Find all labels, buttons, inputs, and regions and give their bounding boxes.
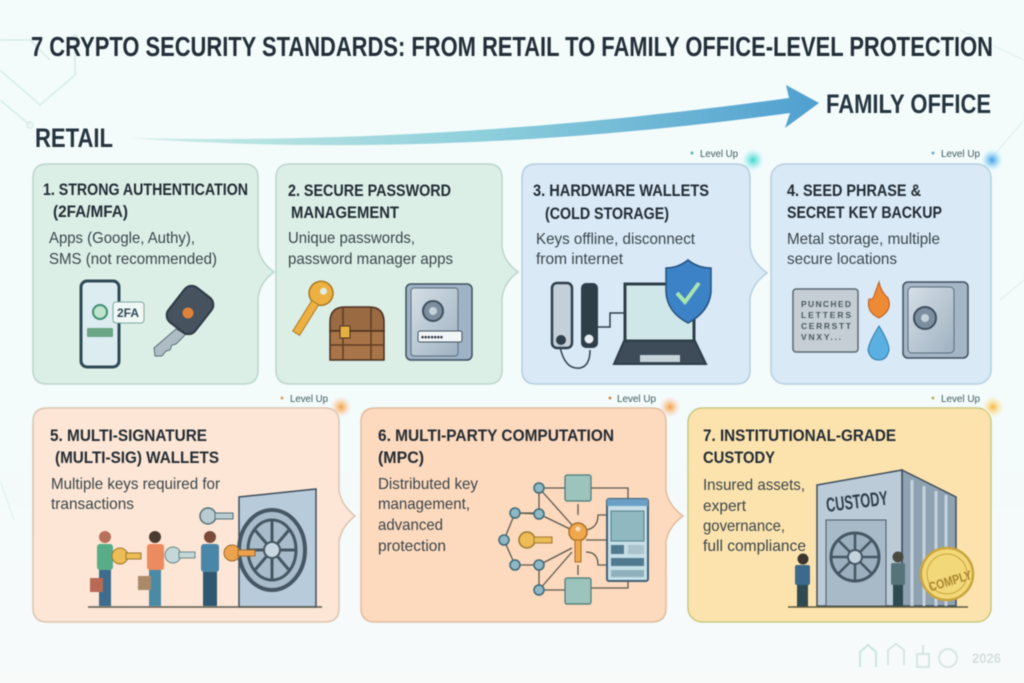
label: family office: FAMILY OFFICE [826, 89, 991, 119]
heading: 1. STRONG AUTHENTICATION [43, 180, 248, 199]
description: secure locations [787, 251, 897, 268]
compliance stamp: COMPLY [927, 567, 974, 594]
ground line [788, 606, 968, 608]
footer icons and year: 2026 [972, 650, 1001, 666]
heading: (MPC) [378, 448, 424, 467]
nodes [499, 483, 544, 595]
icon: water drop [868, 326, 889, 360]
progress arrow from retail to family office [130, 85, 819, 145]
description: Multiple keys required for [51, 476, 221, 493]
heading: SECRET KEY BACKUP [787, 203, 942, 222]
level up tag 4 [932, 148, 1003, 171]
icon: safe [903, 282, 968, 358]
description: full compliance [703, 538, 806, 555]
heading: 2. SECURE PASSWORD [288, 181, 451, 200]
description: protection [378, 538, 446, 555]
level up tag 6 [608, 393, 681, 418]
level up tag 7: Level Up [941, 393, 980, 405]
panel 6: multi-party computation [361, 408, 683, 622]
description: SMS (not recommended) [49, 251, 217, 268]
icon: phone with 2FA [81, 281, 144, 367]
key gold right [224, 545, 255, 561]
icon: flame [868, 282, 889, 318]
description: governance, [703, 518, 785, 535]
icon: punched metal plate: CERRSTT [801, 321, 852, 331]
heading: 5. MULTI-SIGNATURE [50, 426, 207, 445]
panel 1: strong authentication [33, 164, 274, 384]
description: Keys offline, disconnect [536, 231, 696, 248]
network diagram [499, 475, 648, 604]
level up tag 4: Level Up [941, 148, 980, 160]
people holding keys [88, 508, 322, 607]
level up tag 5: Level Up [290, 393, 328, 405]
icon: car-style key [154, 282, 217, 356]
icon: punched metal plate: PUNCHED [801, 299, 851, 309]
central gold key [569, 523, 587, 562]
level up tag 3: Level Up [700, 148, 738, 160]
description: password manager apps [288, 251, 453, 268]
person two [138, 531, 164, 606]
panel 3: hardware wallets [522, 164, 767, 384]
guard left [795, 554, 810, 607]
level up tag 5 [280, 393, 352, 418]
device panel [607, 499, 648, 581]
key floating [200, 508, 233, 524]
heading: 7. INSTITUTIONAL-GRADE [703, 426, 896, 445]
label: retail: RETAIL [35, 123, 113, 153]
small gold key [519, 532, 552, 548]
panel 4: seed phrase backup [771, 164, 991, 384]
description: expert [703, 498, 747, 515]
description: Insured assets, [703, 477, 805, 494]
description: Apps (Google, Authy), [49, 230, 195, 247]
guard right [891, 552, 905, 607]
level up tag 6: Level Up [617, 393, 656, 405]
level up tag 3 [690, 148, 764, 171]
heading: MANAGEMENT [291, 203, 400, 222]
icon: laptop [614, 284, 706, 364]
icon: punched metal plate: LETTERS [801, 310, 851, 320]
key gold left [112, 548, 141, 564]
icon: combination safe: ••••••• [421, 332, 443, 342]
guards [795, 552, 905, 607]
description: Unique passwords, [288, 230, 415, 247]
key silver middle [165, 547, 195, 563]
puzzle pieces [565, 475, 591, 604]
icon: punched metal plate: VNXY... [801, 332, 841, 342]
heading: 3. HARDWARE WALLETS [533, 181, 709, 200]
panel 5: multi-signature wallets [33, 408, 355, 622]
icon: hardware wallet devices [552, 283, 625, 368]
person three [201, 531, 219, 606]
heading: (COLD STORAGE) [545, 204, 669, 223]
footer icons and year [860, 644, 1001, 667]
heading: (2FA/MFA) [53, 202, 128, 221]
ground line [88, 606, 322, 608]
icon: phone with 2FA: 2FA [117, 306, 139, 320]
description: from internet [536, 251, 624, 268]
panel 2: secure password management [276, 164, 518, 384]
description: management, [378, 496, 470, 513]
decorative circuit pattern [0, 30, 1024, 520]
icon: punched metal plate [793, 289, 858, 352]
person one [90, 531, 113, 606]
heading: CUSTODY [703, 448, 776, 467]
compliance stamp [921, 548, 974, 600]
heading: 4. SEED PHRASE & [787, 181, 921, 200]
icon: combination safe [406, 284, 472, 360]
description: advanced [378, 517, 443, 534]
description: Metal storage, multiple [787, 231, 940, 248]
icon: treasure chest [330, 307, 384, 360]
level up tag 7 [932, 393, 1004, 418]
panel 7: institutional-grade custody [688, 408, 991, 622]
description: transactions [51, 496, 134, 513]
description: Distributed key [378, 476, 478, 493]
heading: (MULTI-SIG) WALLETS [55, 448, 219, 467]
icon: gold key [286, 277, 338, 340]
icon: shield with check [666, 260, 711, 323]
icon: vault door [239, 489, 316, 607]
heading: 6. MULTI-PARTY COMPUTATION [378, 426, 614, 445]
icon: custody building: CUSTODY [825, 488, 890, 517]
icon: custody building [817, 470, 956, 606]
